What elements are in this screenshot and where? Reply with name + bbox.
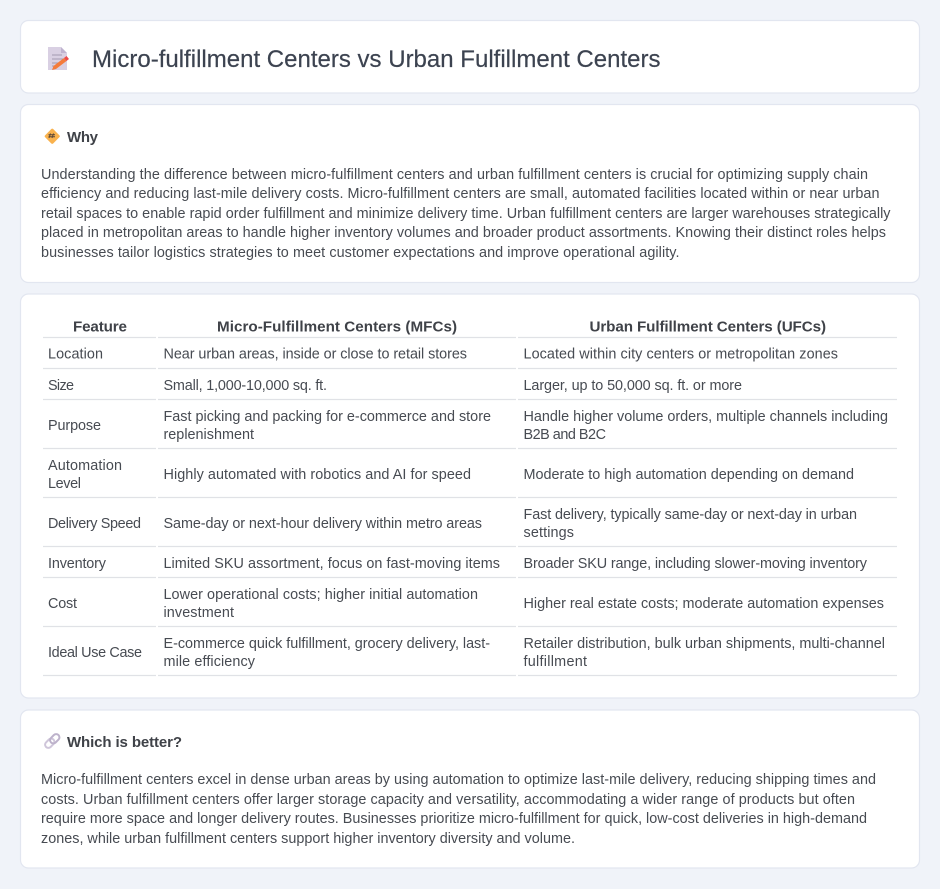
row: automation level: [48, 458, 854, 492]
text block: why explanation: businesses tailor logistics strategies to meet customer expectations and improve operational agility.: [41, 245, 680, 261]
row: purpose: Fast picking and packing for e-commerce and store: [164, 409, 491, 425]
row: inventory: Inventory: [48, 556, 107, 572]
row: delivery speed: [48, 507, 857, 541]
row: automation level: Automation: [48, 458, 122, 474]
row: ideal use case: E-commerce quick fulfillment, grocery delivery, last-: [164, 636, 490, 652]
text block: which is better explanation: [41, 772, 876, 847]
row: location: Located within city centers or metropolitan zones: [524, 346, 838, 362]
text block: which is better explanation: require more space and longer delivery routes. Businesses prioritize micro-fulfillment for quick, low-cost deliveries in high-demand: [41, 811, 867, 827]
row: inventory: Broader SKU range, including slower-moving inventory: [524, 556, 868, 572]
row: purpose: B2B and B2C: [524, 427, 606, 443]
text block: why explanation: retail spaces to enable rapid order fulfillment and minimize delivery time. Urban fulfillment centers are larger warehouses strategically: [41, 206, 891, 222]
row: ideal use case: Retailer distribution, bulk urban shipments, multi-channel: [524, 636, 885, 652]
row: ideal use case: fulfillment: [524, 654, 587, 670]
row: inventory: [48, 556, 868, 572]
row: cost: Higher real estate costs; moderate automation expenses: [524, 596, 884, 612]
row: size: Larger, up to 50,000 sq. ft. or more: [524, 378, 742, 394]
icon: road sign diamond: [44, 128, 60, 144]
row: inventory: Limited SKU assortment, focus on fast-moving items: [164, 556, 500, 572]
row: size: [48, 378, 742, 394]
title: Micro-fulfillment Centers vs Urban Fulfillment Centers: [92, 46, 660, 73]
text block: why explanation: efficiency and reducing last-mile delivery costs. Micro-fulfillment centers are small, automated facilities located within or near urban: [41, 186, 880, 202]
heading: why: Why: [67, 129, 99, 146]
row: purpose: replenishment: [164, 427, 254, 443]
row: cost: investment: [164, 605, 234, 621]
row: purpose: Handle higher volume orders, multiple channels including: [524, 409, 888, 425]
row: location: [48, 346, 838, 362]
table header row: Urban Fulfillment Centers (UFCs): [590, 318, 826, 336]
panel: why: [20, 104, 920, 282]
text block: why explanation: Understanding the difference between micro-fulfillment centers and urban fulfillment centers is crucial for optimizing supply chain: [41, 167, 868, 183]
table header row: [73, 318, 826, 336]
table header row: Micro-Fulfillment Centers (MFCs): [217, 318, 457, 336]
panel: which is better: [20, 710, 920, 868]
row: delivery speed: Delivery Speed: [48, 516, 141, 532]
row: location: Near urban areas, inside or close to retail stores: [164, 346, 467, 362]
row: automation level: Highly automated with robotics and AI for speed: [164, 467, 471, 483]
row: purpose: [48, 409, 888, 443]
icon: document with pencil: [48, 47, 69, 70]
row: location: Location: [48, 346, 103, 362]
panel: title header: [20, 20, 920, 93]
row: ideal use case: mile efficiency: [164, 654, 256, 670]
row: size: Small, 1,000-10,000 sq. ft.: [164, 378, 327, 394]
row: delivery speed: Same-day or next-hour delivery within metro areas: [164, 516, 482, 532]
row: cost: Lower operational costs; higher initial automation: [164, 587, 478, 603]
panel: comparison table: [20, 294, 920, 698]
text block: why explanation: [41, 167, 891, 261]
row: delivery speed: settings: [524, 525, 574, 541]
text block: why explanation: placed in metropolitan areas to handle higher inventory volumes and broader product assortments. Knowing their distinct roles helps: [41, 225, 886, 241]
row: automation level: Level: [48, 476, 81, 492]
row: automation level: Moderate to high automation depending on demand: [524, 467, 854, 483]
table header row: Feature: [73, 318, 127, 336]
text block: which is better explanation: zones, while urban fulfillment centers support higher inventory diversity and volume.: [41, 831, 575, 847]
row: purpose: Purpose: [48, 418, 101, 434]
row: ideal use case: [48, 636, 885, 670]
row: delivery speed: Fast delivery, typically same-day or next-day in urban: [524, 507, 857, 523]
heading: which is better: Which is better?: [67, 734, 182, 751]
row: cost: Cost: [48, 596, 77, 612]
text block: which is better explanation: costs. Urban fulfillment centers offer larger storage capacity and versatility, accommodating a wider range of products but often: [41, 792, 855, 808]
text block: which is better explanation: Micro-fulfillment centers excel in dense urban areas by using automation to optimize last-mile delivery, reducing shipping times and: [41, 772, 876, 788]
row: cost: [48, 587, 884, 621]
row: ideal use case: Ideal Use Case: [48, 645, 142, 661]
row: size: Size: [48, 378, 74, 394]
icon: chain link: [44, 733, 61, 749]
